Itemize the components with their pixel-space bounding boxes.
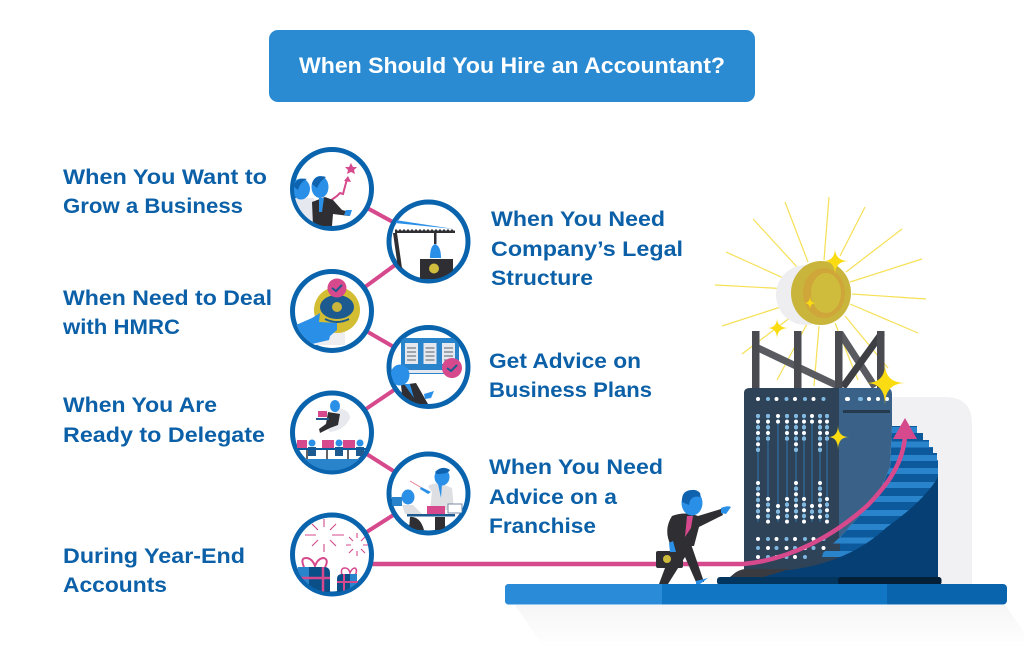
heading: Get Advice on Business Plans: Business Plans [489, 378, 652, 402]
platform [505, 584, 1007, 604]
heading: When You Want to Grow a Business: When You Want to [63, 165, 267, 189]
heading: When You Are Ready to Delegate: Ready to Delegate [63, 423, 265, 447]
businessman walking with briefcase [656, 490, 731, 584]
title banner [269, 30, 755, 102]
stairs [817, 426, 938, 580]
heading: During Year-End Accounts: During Year-End [63, 544, 245, 568]
stair treads [822, 427, 938, 557]
title banner: When Should You Hire an Accountant? [299, 53, 725, 78]
tower dot rows [758, 399, 888, 557]
heading: When You Need Advice on a Franchise [489, 455, 663, 538]
growth arrow [372, 418, 917, 564]
heading: When You Are Ready to Delegate: When You Are [63, 393, 217, 417]
heading: When Need to Deal with HMRC: When Need to Deal [63, 286, 272, 310]
heading: When You Need Company's Legal Structure [491, 207, 683, 290]
circle: year-end fireworks and gifts [292, 515, 372, 594]
heading: During Year-End Accounts [63, 544, 245, 597]
heading: When Need to Deal with HMRC [62, 286, 272, 339]
tower window columns [758, 416, 827, 522]
circle: legal structure crane [389, 202, 468, 281]
heading: When You Need Advice on a Franchise: Advice on a [489, 485, 618, 509]
heading: When You Are Ready to Delegate [63, 393, 265, 447]
office tower [744, 388, 892, 575]
circle: franchise advice [389, 454, 468, 533]
sparkles [767, 248, 906, 450]
circle: HMRC crest [292, 272, 372, 350]
heading: Get Advice on Business Plans: Get Advice on [489, 349, 641, 373]
heading: When You Need Advice on a Franchise: When You Need [489, 455, 663, 479]
circle: ready to delegate [290, 393, 375, 474]
heading: Get Advice on Business Plans [489, 349, 652, 402]
heading: When You Need Company's Legal Structure: When You Need [491, 207, 665, 231]
stair base curve [717, 477, 942, 585]
heading: When Need to Deal with HMRC: with HMRC [62, 315, 180, 339]
grey backdrop panel [880, 397, 972, 585]
heading: When You Need Advice on a Franchise: Franchise [489, 514, 596, 538]
heading: When You Want to Grow a Business: Grow a Business [63, 194, 243, 218]
heading: When You Need Company's Legal Structure: Structure [491, 266, 593, 290]
circle: business plans [389, 328, 468, 406]
circle: growing a business [292, 150, 372, 228]
connector lines between circles [332, 189, 428, 554]
building letters frame [752, 331, 884, 388]
heading: When You Need Company's Legal Structure: Company’s Legal [491, 237, 683, 261]
heading: When You Want to Grow a Business [63, 165, 267, 218]
platform shadow [515, 605, 1024, 649]
heading: During Year-End Accounts: Accounts [63, 573, 167, 597]
icon: sun rays and coin [715, 197, 926, 386]
